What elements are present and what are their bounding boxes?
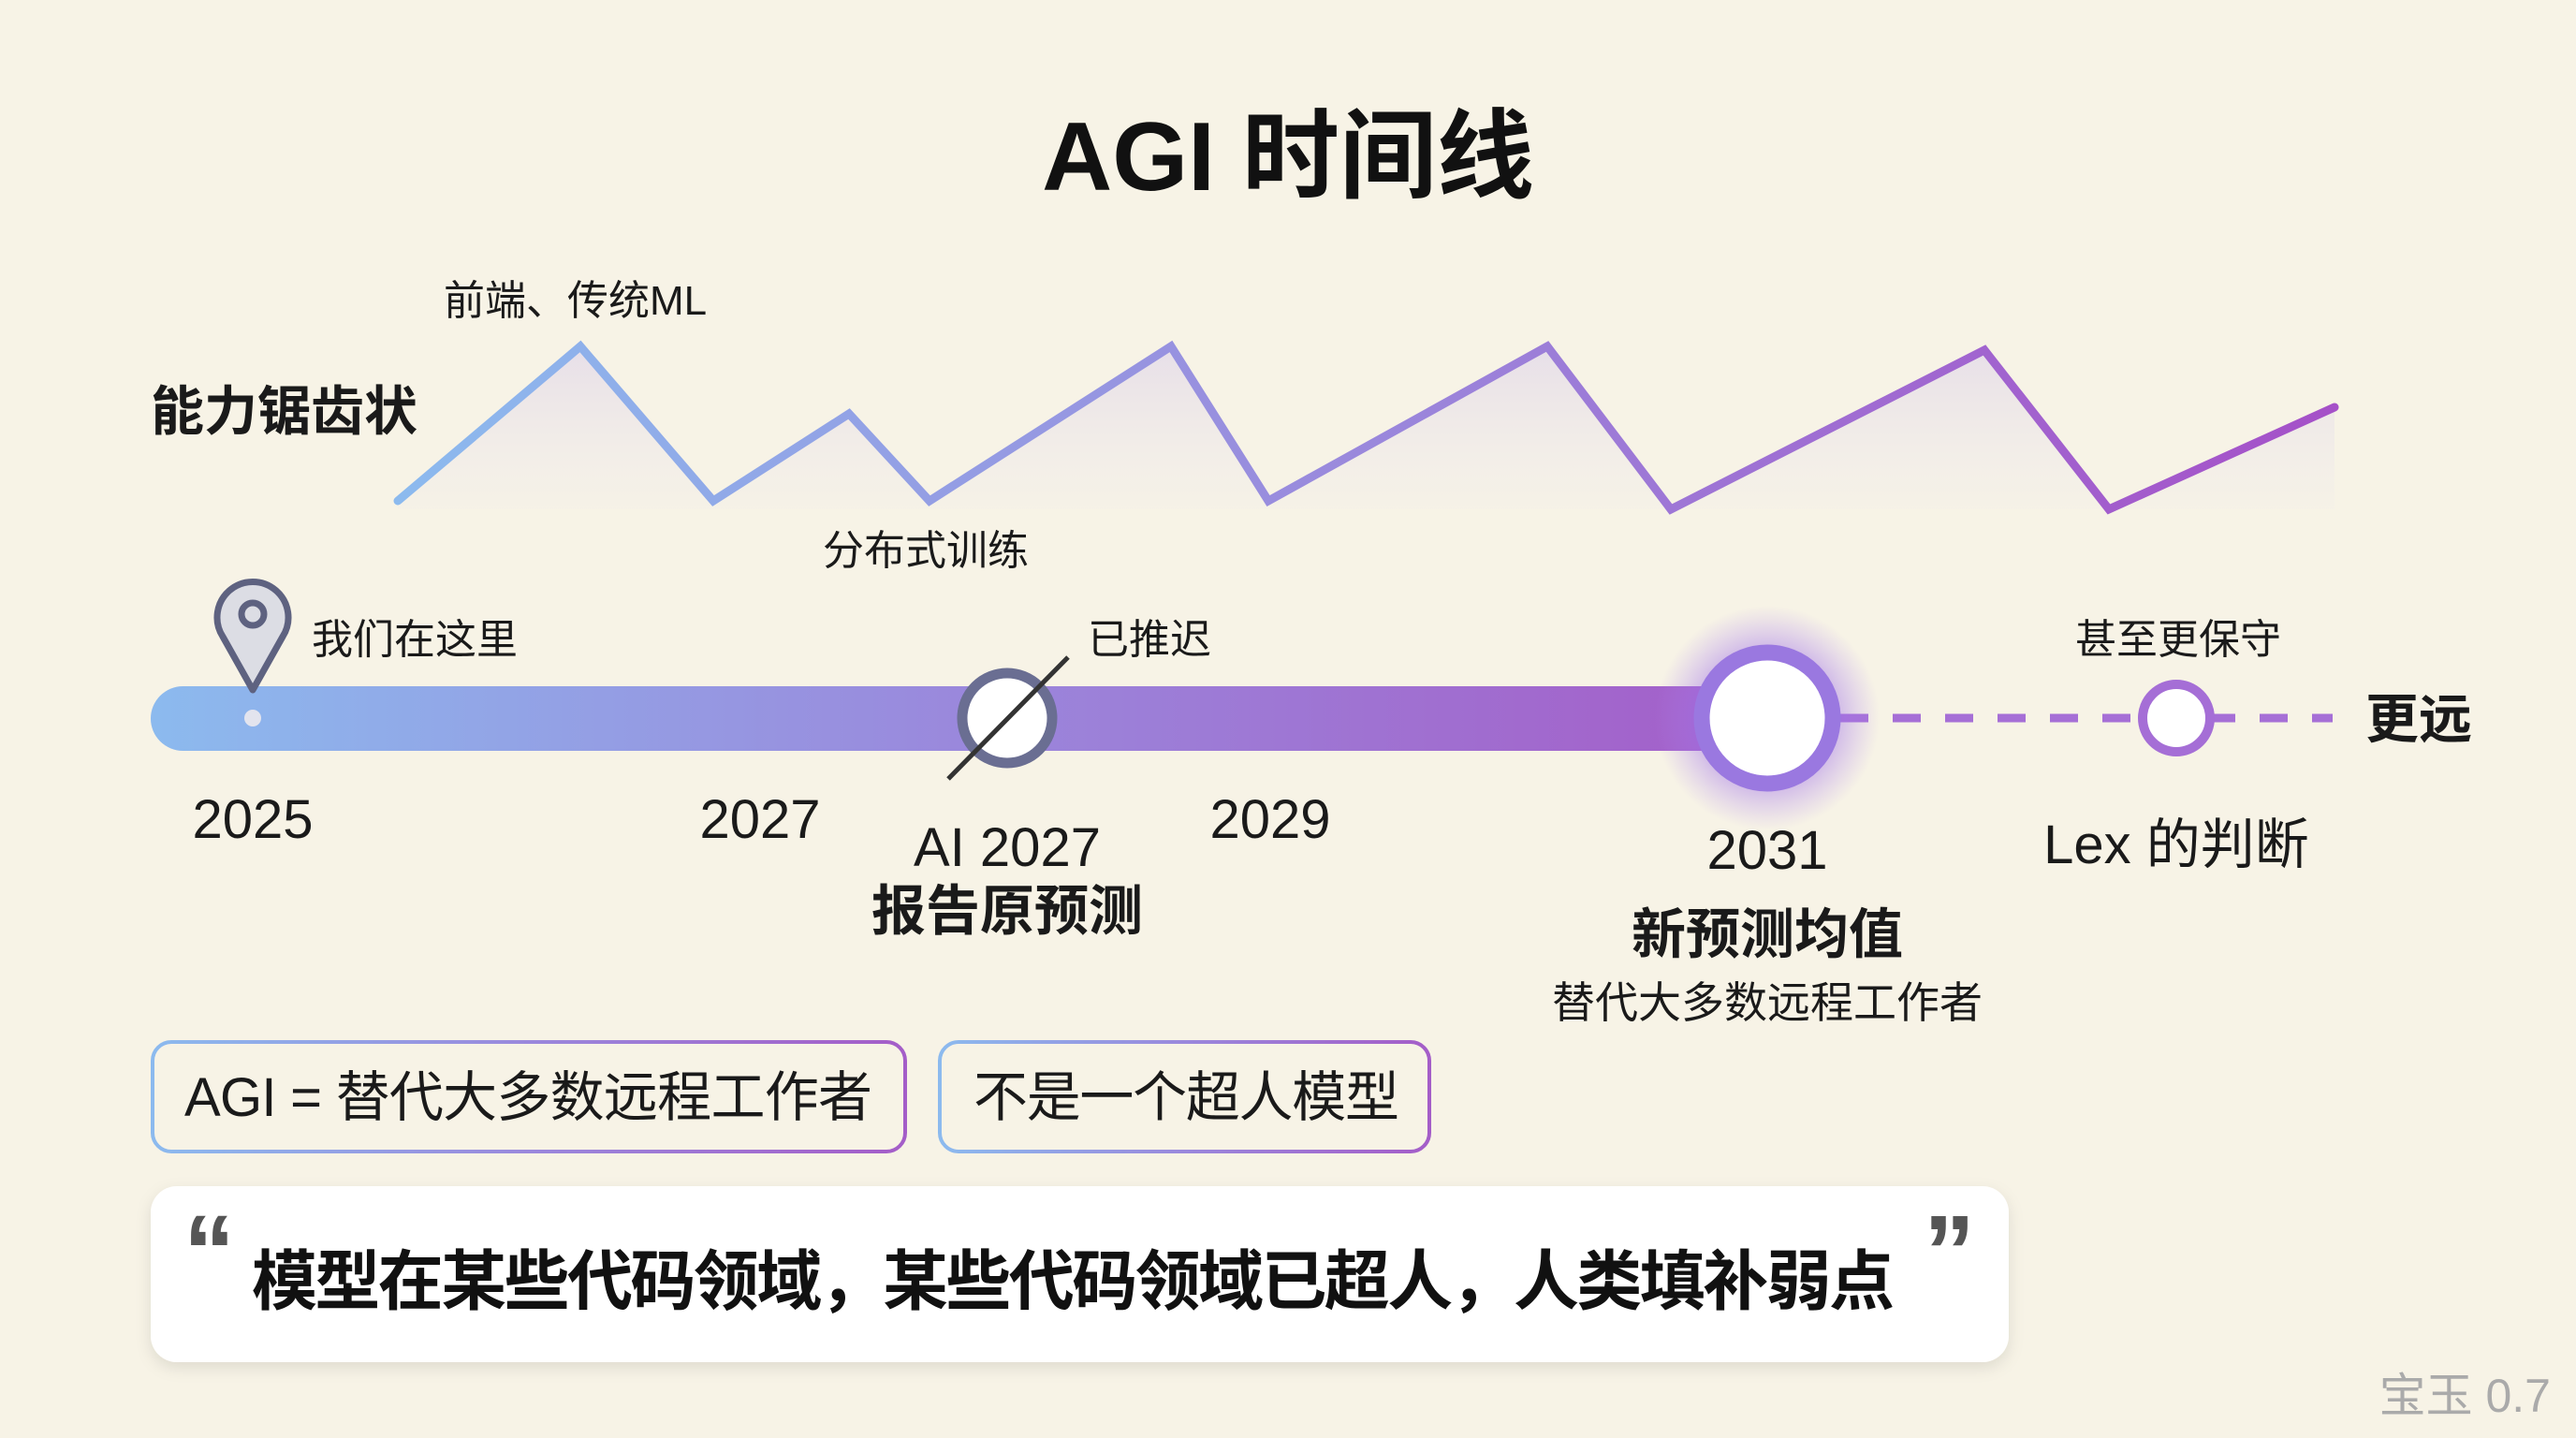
label: capability jagged: 能力锯齿状 [151, 382, 417, 442]
title: AGI 时间线 [1042, 103, 1534, 212]
year labels [192, 789, 2309, 1027]
quote box: ” [1924, 1195, 1975, 1310]
label: distributed training: 分布式训练 [823, 528, 1029, 574]
tag: not a superhuman model: 不是一个超人模型 [973, 1067, 1399, 1128]
label: further: 更远 [2365, 690, 2472, 750]
year labels: 替代大多数远程工作者 [1552, 978, 1983, 1027]
tag: AGI definition [153, 1042, 905, 1152]
quote box [151, 1186, 2009, 1362]
label: delayed: 已推迟 [1088, 617, 1211, 663]
label: frontend ML: 前端、传统ML [444, 278, 707, 324]
icon: location pin [217, 582, 288, 726]
year labels: 新预测均值 [1632, 904, 1903, 965]
year labels: 报告原预测 [871, 881, 1143, 942]
year labels: 2031 [1706, 820, 1828, 881]
watermark: 宝玉 0.7 [2379, 1370, 2551, 1422]
year labels: 2029 [1209, 789, 1331, 850]
label: we are here: 我们在这里 [312, 617, 518, 663]
year labels: 2025 [192, 789, 314, 850]
node: 2031 glow circle [1655, 606, 1880, 830]
node: Lex circle [2143, 684, 2210, 752]
dashed extension [1840, 713, 2333, 723]
tag: AGI definition: AGI = 替代大多数远程工作者 [184, 1067, 872, 1128]
tag: not a superhuman model [940, 1042, 1429, 1152]
icon: crossed circle AI 2027 [948, 657, 1068, 779]
year labels: AI 2027 [914, 817, 1101, 878]
label: even more conservative: 甚至更保守 [2075, 617, 2281, 663]
jagged capability chart [398, 346, 2334, 509]
year labels: Lex 的判断 [2043, 814, 2309, 875]
quote box: “ [183, 1195, 235, 1310]
year labels: 2027 [699, 789, 821, 850]
quote box: 模型在某些代码领域，某些代码领域已超人，人类填补弱点 [252, 1245, 1895, 1318]
timeline bar [151, 686, 1770, 751]
